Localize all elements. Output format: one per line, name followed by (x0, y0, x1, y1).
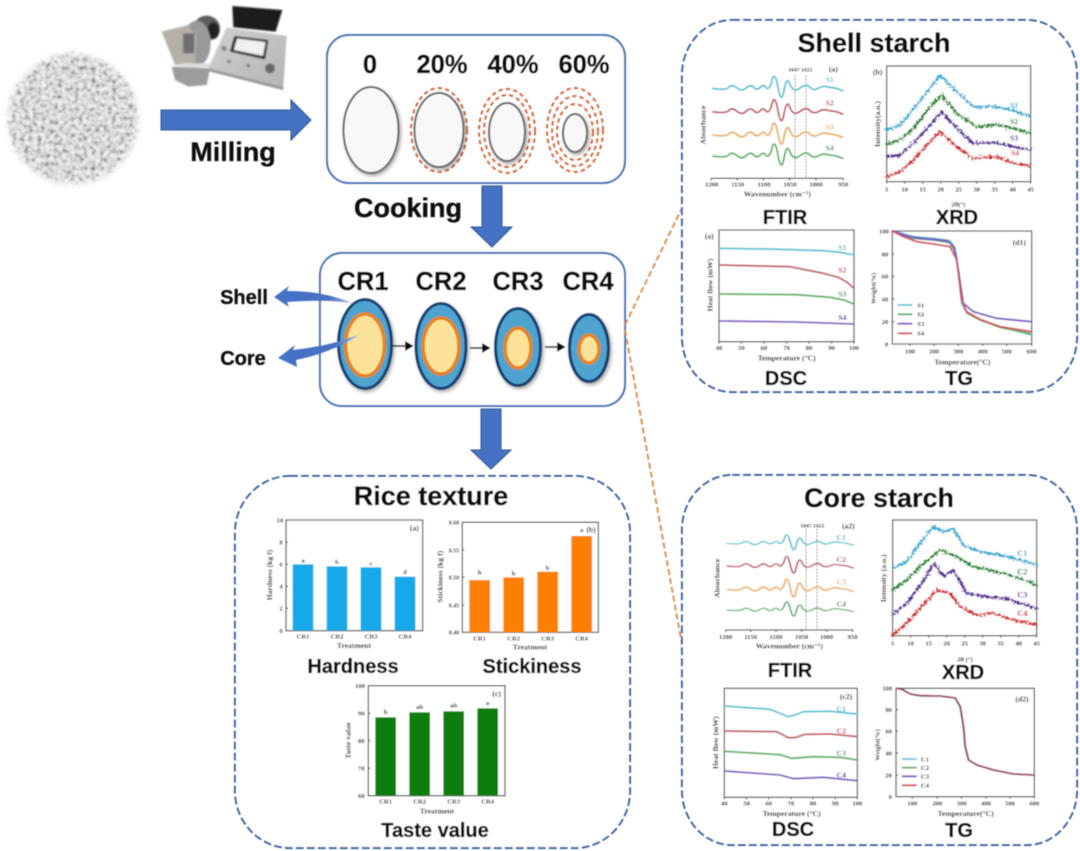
chart: core TG: 200 (932, 800, 943, 807)
chart: hardness bars: a (301, 558, 305, 565)
panel: rice texture (235, 476, 630, 848)
chart: shell XRD: 45 (1027, 187, 1035, 194)
chart: shell TG: 600 (1027, 348, 1037, 355)
icon: rice grain pile (8, 54, 138, 184)
chart: shell FTIR: S4 (826, 144, 834, 153)
chart: core FTIR: 1100 (770, 634, 783, 641)
chart: shell DSC (705, 230, 860, 363)
chart: taste value bars: ab (450, 702, 457, 709)
label: FTIR: FTIR (768, 660, 813, 682)
chart: shell XRD: 2θ(°) (951, 202, 965, 209)
label: Shell: Shell (220, 287, 268, 309)
chart: core TG: C3 (921, 774, 930, 781)
icon: rice milling machine (162, 6, 287, 90)
chart: taste value bars: 100 (355, 683, 366, 690)
chart: shell TG: 100 (905, 348, 916, 355)
chart: shell TG: Weight(%) (870, 273, 877, 304)
chart: shell XRD: (b) (873, 68, 883, 77)
chart: hardness bars: 8 (279, 540, 283, 547)
chart: core DSC: 60 (765, 801, 773, 808)
chart: core XRD: 20 (943, 641, 951, 648)
chart: hardness bars: 2 (279, 606, 283, 613)
chart: shell FTIR: Wavenumber (cm⁻¹) (744, 190, 811, 199)
chart: core TG: 500 (1005, 800, 1016, 807)
panel: cooked rice CR1 to CR4 (320, 253, 625, 406)
chart: core FTIR: 1200 (719, 634, 733, 641)
chart: core DSC: Heat flow (mW) (711, 716, 720, 769)
chart: taste value bars (343, 683, 505, 815)
chart: core TG: 20 (885, 772, 893, 779)
icon: CR3 grain (496, 308, 540, 386)
label: Taste value: Taste value (381, 820, 489, 842)
chart: hardness bars: CR4 (399, 633, 412, 640)
chart: core FTIR: Wavenumber (cm⁻¹) (756, 642, 823, 651)
chart: shell TG: S4 (917, 331, 925, 338)
chart: shell DSC: 60 (761, 345, 768, 352)
chart: hardness bars: Treatment (337, 641, 372, 650)
chart: shell TG (870, 228, 1037, 367)
chart: hardness bars: c (370, 560, 373, 567)
chart: shell TG: Temperature(°C) (934, 358, 991, 367)
chart: shell TG: 80 (882, 251, 889, 258)
chart: shell DSC: Heat flow (mW) (706, 258, 715, 311)
chart: shell TG: 400 (978, 348, 988, 355)
chart: taste value bars: CR3 (447, 799, 461, 806)
chart: core XRD: 25 (961, 641, 969, 648)
chart: stickiness bars: CR3 (541, 635, 555, 642)
label: 40%: 40% (487, 51, 539, 79)
arrow: to rice texture (471, 409, 511, 469)
chart: shell TG: 100 (879, 228, 890, 235)
chart: taste value bars: Treatment (420, 806, 455, 815)
chart: shell XRD: S3 (1010, 134, 1018, 143)
label: DSC: DSC (765, 368, 807, 390)
arrow: CR1 to CR2 (393, 342, 412, 350)
chart: core DSC: C3 (837, 749, 846, 758)
chart: stickiness bars: CR4 (575, 635, 589, 642)
chart: shell XRD: 25 (955, 187, 963, 194)
chart: stickiness bars: CR2 (507, 635, 521, 642)
arrow: CR3 to CR4 (545, 344, 564, 350)
label: XRD: XRD (936, 207, 978, 229)
chart: core XRD: 5 (891, 641, 895, 648)
chart: shell FTIR: S2 (826, 98, 834, 107)
icon: grain 40% (479, 89, 535, 173)
chart: stickiness bars: b (478, 570, 482, 577)
chart: core TG: 100 (882, 686, 893, 693)
chart: hardness bars: b (335, 559, 339, 566)
chart: shell DSC: (a) (705, 232, 714, 241)
chart: core XRD: 35 (997, 641, 1005, 648)
chart: stickiness bars: (b) (586, 525, 596, 534)
chart: taste value bars: 60 (358, 793, 365, 800)
chart: core FTIR: 1047 1022 (800, 523, 825, 529)
label: CR2: CR2 (415, 268, 467, 296)
icon: CR1 grain (338, 300, 392, 388)
chart: core FTIR: 1000 (820, 634, 834, 641)
heading: Shell starch: Shell starch (797, 28, 951, 58)
chart: core FTIR: Absorbance (712, 558, 721, 598)
chart: core FTIR: 950 (848, 634, 858, 641)
chart: core DSC: 40 (721, 801, 728, 808)
chart: shell FTIR: S1 (826, 75, 834, 84)
chart: shell DSC: S2 (838, 266, 847, 275)
chart: shell FTIR: 1050 (783, 182, 797, 189)
label: Stickiness: Stickiness (483, 656, 581, 678)
chart: shell TG: S1 (917, 302, 924, 309)
chart: shell FTIR: 950 (838, 182, 849, 189)
chart: shell XRD: 30 (973, 187, 981, 194)
chart: stickiness bars (436, 521, 598, 651)
chart: hardness bars: d (403, 569, 407, 576)
label: XRD: XRD (942, 662, 984, 684)
chart: shell TG: (d1) (1013, 238, 1026, 247)
icon: grain 60% (547, 88, 603, 172)
label: Cooking: Cooking (354, 193, 462, 223)
chart: shell DSC: 90 (828, 345, 836, 352)
chart: stickiness bars: a (580, 527, 584, 534)
icon: grain 20% (411, 88, 467, 172)
chart: taste value bars: CR4 (481, 799, 495, 806)
chart: shell TG: 40 (882, 296, 889, 303)
chart: core TG: 40 (885, 750, 893, 757)
label: Milling: Milling (190, 137, 276, 167)
chart: core FTIR: C2 (837, 555, 846, 564)
chart: shell XRD: 20 (937, 187, 945, 194)
chart: core XRD: Intensity (a.u.) (879, 554, 888, 602)
chart: shell DSC: 80 (806, 345, 813, 352)
chart: core DSC (711, 688, 863, 818)
chart: core XRD: 2θ (°) (957, 656, 973, 663)
arrow: milling (161, 100, 311, 140)
chart: core TG: 100 (907, 800, 918, 807)
chart: core XRD: 45 (1033, 641, 1041, 648)
chart: core XRD: C2 (1017, 567, 1027, 576)
arrow: cooking (471, 186, 512, 247)
chart: shell XRD: S1 (1010, 100, 1018, 109)
chart: core TG: C2 (921, 765, 930, 772)
chart: shell XRD (873, 66, 1035, 209)
chart: shell DSC: 70 (783, 345, 791, 352)
chart: taste value bars: 90 (358, 711, 365, 718)
chart: stickiness bars: CR1 (473, 635, 486, 642)
chart: shell FTIR: Absorbance (698, 105, 707, 145)
chart: shell FTIR: 1100 (758, 182, 771, 189)
label: FTIR: FTIR (763, 207, 808, 229)
label: 20%: 20% (416, 51, 468, 79)
chart: shell DSC: S3 (838, 290, 847, 299)
chart: core TG (874, 686, 1040, 818)
chart: shell TG: 0 (885, 341, 889, 348)
chart: shell XRD: 40 (1009, 187, 1017, 194)
chart: stickiness bars: b (546, 565, 550, 572)
chart: core FTIR: C1 (837, 533, 846, 542)
chart: core DSC: C4 (837, 770, 846, 779)
chart: shell FTIR (698, 64, 849, 199)
icon: CR4 grain (570, 314, 608, 382)
chart: shell XRD: S2 (1010, 117, 1018, 126)
arrow: to core label (278, 334, 360, 367)
chart: core TG: 600 (1029, 800, 1040, 807)
chart: core TG: 400 (981, 800, 992, 807)
chart: stickiness bars: 0.50 (449, 576, 459, 582)
label: Core: Core (220, 348, 266, 370)
chart: shell XRD: Intensity(a.u.) (873, 101, 882, 147)
arrow: CR2 to CR3 (470, 344, 489, 352)
chart: taste value bars: ab (416, 704, 423, 711)
chart: core XRD (879, 520, 1041, 663)
chart: hardness bars: CR1 (297, 633, 309, 640)
chart: shell DSC: 40 (716, 345, 723, 352)
chart: stickiness bars: 0.55 (449, 548, 459, 554)
chart: shell FTIR: S3 (826, 122, 834, 131)
chart: taste value bars: b (384, 709, 388, 716)
chart: stickiness bars: 0.45 (449, 603, 459, 609)
chart: hardness bars: (a) (410, 523, 419, 532)
chart: core DSC: C1 (837, 705, 846, 714)
chart: hardness bars: Hardness (kg f) (265, 549, 274, 600)
label: Hardness: Hardness (307, 656, 399, 678)
chart: hardness bars: 10 (277, 517, 284, 524)
chart: shell FTIR: 1047 1022 (788, 67, 813, 73)
label: CR4: CR4 (562, 268, 614, 296)
chart: core XRD: 40 (1015, 641, 1023, 648)
chart: core TG: Weight(%) (874, 729, 881, 761)
chart: hardness bars: 6 (279, 562, 283, 569)
chart: taste value bars: Taste value (343, 722, 352, 759)
chart: core FTIR: 1050 (795, 634, 809, 641)
chart: core XRD: 10 (907, 641, 915, 648)
chart: core DSC: 90 (832, 801, 839, 808)
panel: milling degrees (327, 35, 625, 183)
chart: shell TG: 500 (1002, 348, 1012, 355)
chart: taste value bars: (c) (492, 689, 501, 698)
chart: core DSC: 80 (810, 801, 817, 808)
chart: core DSC: 70 (788, 801, 795, 808)
panel: shell starch (682, 20, 1077, 392)
heading: Core starch: Core starch (804, 483, 954, 513)
chart: shell XRD: 35 (991, 187, 999, 194)
chart: core TG: Temperature(°C) (938, 809, 994, 818)
chart: shell DSC: S1 (838, 243, 847, 252)
chart: core FTIR: (a2) (842, 522, 855, 531)
chart: taste value bars: CR1 (379, 799, 392, 806)
chart: shell XRD: 10 (901, 187, 909, 194)
chart: taste value bars: CR2 (413, 799, 427, 806)
connector: to shell starch panel (625, 206, 683, 325)
chart: core FTIR: C3 (837, 577, 846, 586)
chart: stickiness bars: 0.40 (449, 631, 459, 637)
arrow: to shell label (274, 286, 352, 307)
chart: core TG: 80 (885, 707, 893, 714)
chart: core DSC: Temperature (°C) (763, 809, 821, 818)
chart: shell XRD: 5 (885, 187, 889, 194)
label: TG: TG (945, 368, 973, 390)
chart: hardness bars: CR3 (365, 633, 378, 640)
chart: core DSC: C2 (837, 726, 846, 735)
chart: shell TG: S3 (917, 321, 925, 328)
chart: shell DSC: S4 (838, 313, 847, 322)
label: CR3: CR3 (492, 268, 544, 296)
chart: taste value bars: a (486, 700, 490, 707)
chart: core XRD: 30 (979, 641, 987, 648)
chart: hardness bars: 4 (279, 584, 283, 591)
chart: stickiness bars: Stickiness (kg f) (436, 550, 445, 603)
chart: core FTIR: 1150 (744, 634, 758, 641)
chart: core DSC: (c2) (840, 692, 853, 701)
chart: shell TG: S2 (917, 312, 925, 319)
icon: CR2 grain (416, 304, 466, 388)
chart: core FTIR: C4 (837, 600, 846, 609)
chart: shell FTIR: 1150 (731, 182, 745, 189)
label: 0: 0 (363, 51, 377, 79)
label: CR1: CR1 (337, 268, 389, 296)
chart: core XRD: C3 (1017, 591, 1027, 600)
label: TG: TG (945, 820, 973, 842)
chart: core XRD: C4 (1017, 609, 1028, 618)
chart: shell DSC: 100 (849, 345, 860, 352)
chart: core TG: 60 (885, 729, 893, 736)
label: 60%: 60% (558, 51, 610, 79)
chart: core TG: 300 (957, 800, 967, 807)
chart: shell FTIR: 1200 (705, 182, 719, 189)
chart: stickiness bars: 0.60 (449, 521, 459, 527)
heading: Rice texture: Rice texture (354, 481, 508, 511)
chart: core XRD: 15 (925, 641, 933, 648)
chart: shell TG: 300 (953, 348, 964, 355)
chart: shell TG: 60 (882, 274, 889, 281)
chart: stickiness bars: b (512, 571, 516, 578)
icon: grain 0% (344, 87, 398, 173)
chart: hardness bars: 0 (279, 628, 283, 635)
chart: shell XRD: S4 (1011, 148, 1019, 157)
chart: shell TG: 200 (929, 348, 940, 355)
chart: shell DSC: Temperature (°C) (758, 354, 816, 363)
label: DSC: DSC (772, 819, 814, 841)
chart: shell FTIR: (a) (829, 64, 838, 73)
chart: shell DSC: 50 (738, 345, 745, 352)
connector: to core starch panel (625, 330, 683, 650)
chart: core DSC: 100 (852, 801, 863, 808)
chart: core TG: C4 (921, 783, 930, 790)
chart: core TG: 0 (889, 794, 893, 801)
chart: core TG: C1 (921, 756, 929, 763)
chart: shell TG: 20 (882, 319, 889, 326)
chart: shell XRD: 15 (919, 187, 927, 194)
chart: taste value bars: 80 (358, 738, 365, 745)
chart: shell FTIR: 1000 (809, 182, 823, 189)
chart: core DSC: 50 (743, 801, 751, 808)
chart: core TG: (d2) (1015, 694, 1029, 703)
chart: hardness bars (265, 517, 423, 650)
chart: stickiness bars: Treatment (513, 642, 548, 651)
chart: hardness bars: CR2 (331, 633, 344, 640)
panel: core starch (682, 475, 1077, 845)
chart: core FTIR (712, 522, 858, 651)
chart: taste value bars: 70 (358, 766, 365, 773)
chart: core XRD: C1 (1017, 549, 1027, 558)
